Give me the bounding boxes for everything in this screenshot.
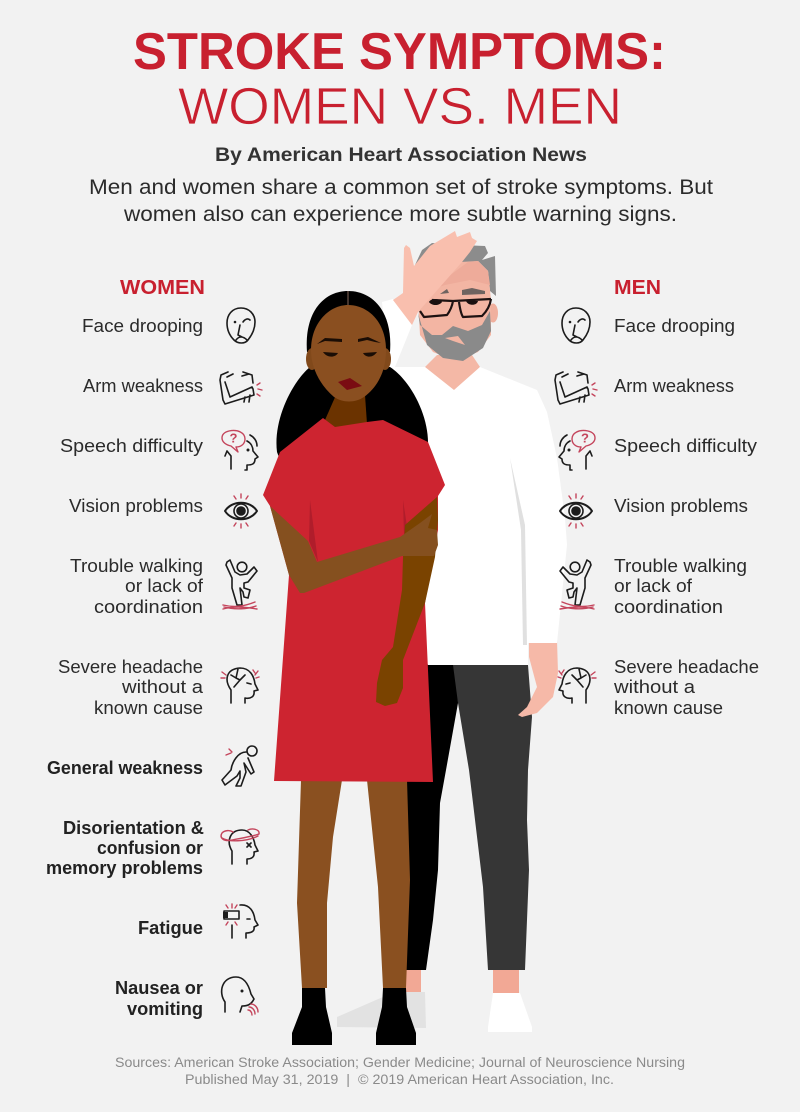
woman boots (292, 988, 416, 1045)
title: STROKE SYMPTOMS: (133, 23, 666, 81)
symptom: nausea: Nausea or (115, 978, 203, 998)
symptom: trouble walking: or lack of (614, 576, 693, 596)
woman eyes (323, 352, 377, 357)
woman hair part (347, 291, 349, 305)
man lower hand (518, 640, 558, 717)
symptom: arm weakness: Arm weakness (83, 376, 203, 396)
column heading: women: WOMEN (120, 277, 205, 299)
symptom: severe headache (558, 657, 759, 718)
woman legs (297, 780, 410, 988)
symptom: face drooping (82, 308, 255, 343)
man eyebrows (440, 288, 485, 295)
symptom: vision problems: Vision problems (614, 496, 748, 516)
symptom: general weakness: General weakness (47, 758, 203, 778)
symptom: face drooping (562, 308, 735, 343)
title: WOMEN VS. MEN (178, 78, 622, 136)
footer sources (115, 1055, 685, 1087)
symptom: trouble walking (560, 556, 747, 617)
woman eyebrows (317, 337, 381, 344)
woman back hair (276, 367, 428, 460)
symptom: general weakness (47, 746, 257, 786)
men's symptom list (555, 308, 759, 718)
column heading: men: MEN (614, 277, 661, 299)
symptom: severe headache: Severe headache (614, 657, 759, 677)
man shoe shadowed (337, 992, 426, 1028)
symptom: speech difficulty (559, 430, 757, 470)
man beard (418, 311, 491, 361)
byline: By American Heart Association News (215, 145, 587, 166)
woman mouth (338, 378, 362, 390)
woman top hair (307, 291, 390, 352)
man forehead shadow (430, 261, 490, 290)
title (133, 23, 666, 136)
symptom: fatigue (138, 904, 258, 938)
symptom: disorientation: memory problems (46, 858, 203, 878)
man hair (415, 243, 496, 296)
man raised hand (393, 231, 477, 325)
intro text: Men and women share a common set of stroke symptoms. But (89, 176, 713, 199)
intro text (89, 176, 713, 226)
symptom: arm weakness: Arm weakness (614, 376, 734, 396)
symptom: vision problems (69, 494, 257, 528)
symptom: vision problems (560, 494, 748, 528)
symptom: trouble walking: Trouble walking (614, 556, 747, 576)
man mouth (445, 336, 465, 345)
symptom: nausea: vomiting (127, 999, 203, 1019)
man shoe white (488, 993, 532, 1032)
women's symptom list (46, 308, 262, 1019)
woman neck (325, 395, 367, 429)
woman ears (306, 348, 391, 370)
symptom: speech difficulty: ? (581, 430, 589, 446)
man face (418, 261, 491, 361)
man ankles (406, 970, 519, 993)
man neck (425, 355, 480, 392)
man ear (488, 304, 498, 322)
symptom: speech difficulty: Speech difficulty (614, 436, 757, 456)
symptom: face drooping: Face drooping (82, 316, 203, 336)
woman front arm (270, 506, 438, 593)
symptom: severe headache: Severe headache (58, 657, 203, 677)
symptom: trouble walking: Trouble walking (70, 556, 203, 576)
footer sources: Sources: American Stroke Association; Gender Medicine; Journal of Neuroscience Nursing (115, 1055, 685, 1070)
symptom: trouble walking: or lack of (125, 576, 204, 596)
symptom: speech difficulty: Speech difficulty (60, 436, 203, 456)
woman dress (263, 418, 445, 782)
dress folds (309, 500, 408, 562)
symptom: severe headache: without a (121, 677, 204, 697)
symptom: fatigue: Fatigue (138, 918, 203, 938)
symptom: speech difficulty (60, 430, 258, 470)
man eyes (429, 299, 478, 305)
symptom: disorientation: Disorientation & (63, 818, 204, 838)
symptom: nausea (115, 977, 258, 1019)
symptom: trouble walking: coordination (614, 597, 723, 617)
symptom: trouble walking (70, 556, 257, 617)
woman face (311, 305, 386, 402)
footer sources: Published May 31, 2019 | © 2019 American Heart Association, Inc. (185, 1072, 614, 1087)
symptom: severe headache: known cause (94, 698, 203, 718)
symptom: severe headache: known cause (614, 698, 723, 718)
woman back arm (376, 497, 438, 706)
symptom: severe headache: without a (613, 677, 696, 697)
symptom: speech difficulty: ? (230, 430, 238, 446)
illustration: man (337, 231, 567, 1032)
man front leg (453, 665, 532, 970)
symptom: trouble walking: coordination (94, 597, 203, 617)
man glasses (420, 299, 491, 317)
symptom: arm weakness (83, 372, 262, 404)
illustration: woman (263, 291, 445, 1045)
man shirt fold (510, 458, 527, 645)
man back leg (406, 660, 458, 970)
symptom: arm weakness (555, 372, 734, 404)
symptom: disorientation: confusion or (97, 838, 203, 858)
intro text: women also can experience more subtle warning signs. (123, 203, 677, 226)
symptom: vision problems: Vision problems (69, 496, 203, 516)
symptom: severe headache (58, 657, 259, 718)
symptom: disorientation (46, 818, 259, 878)
symptom: face drooping: Face drooping (614, 316, 735, 336)
man shirt (380, 299, 567, 665)
